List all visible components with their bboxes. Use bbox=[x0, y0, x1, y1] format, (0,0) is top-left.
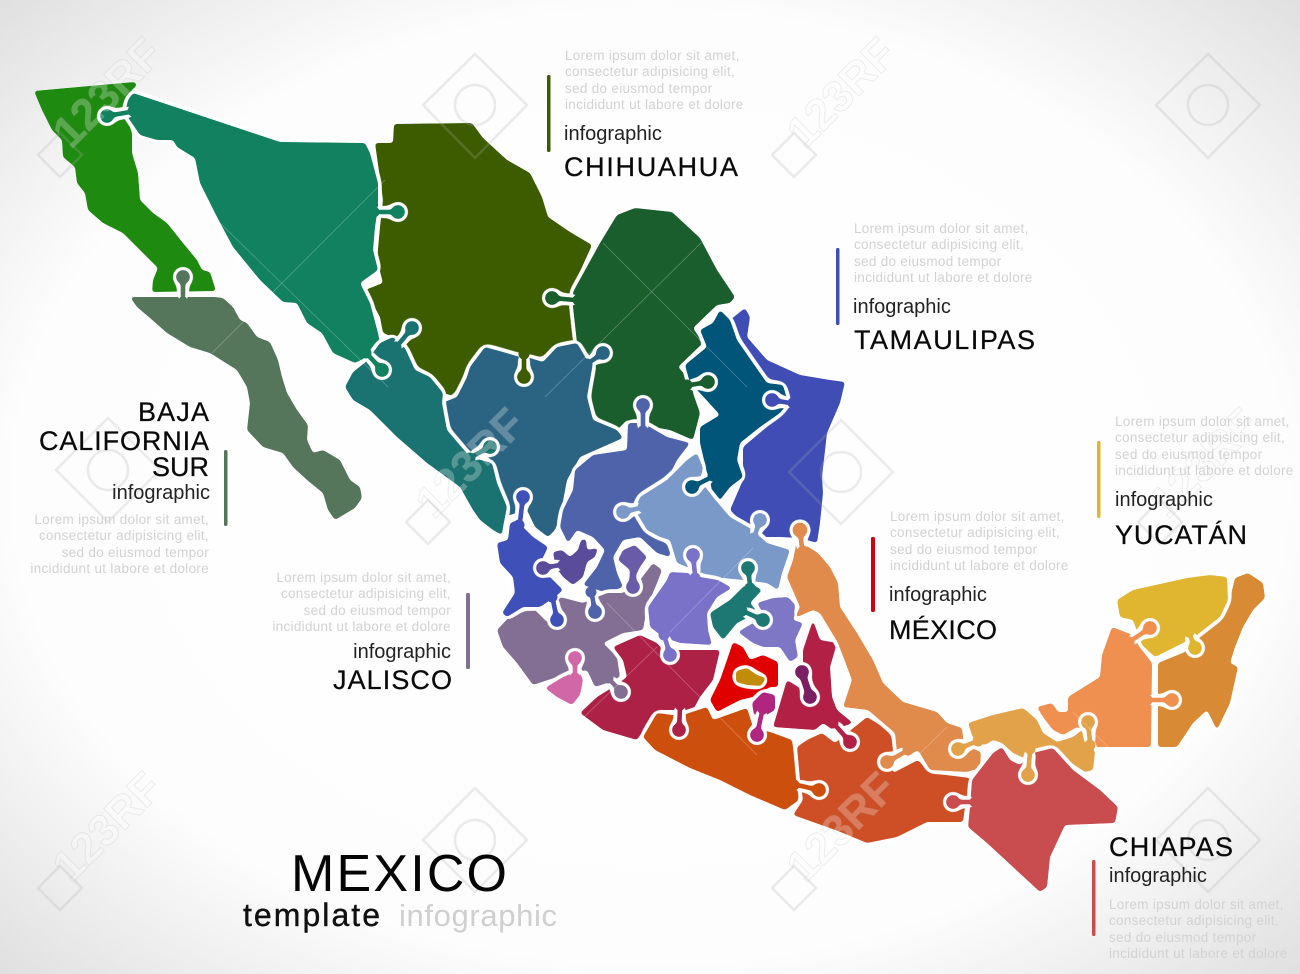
label: México bbox=[871, 509, 1069, 645]
region: Chiapas bbox=[968, 747, 1118, 892]
label: Chiapas: infographic bbox=[1109, 865, 1207, 887]
region: Baja California bbox=[34, 82, 216, 292]
label: Tamaulipas bbox=[836, 221, 1035, 355]
watermarks: 123RF bbox=[1140, 399, 1268, 527]
region: Baja California Sur bbox=[130, 297, 362, 520]
label: México: MÉXICO bbox=[889, 615, 997, 645]
title: MEXICO bbox=[291, 845, 507, 903]
region: Nayarit bbox=[497, 520, 563, 617]
label: Chihuahua: infographic bbox=[564, 123, 662, 145]
label: Yucatán bbox=[1097, 414, 1294, 550]
label: Jalisco: incididunt ut labore et dolore bbox=[272, 619, 451, 634]
label: Baja California Sur: incididunt ut labore et dolore bbox=[30, 561, 209, 576]
label: Chiapas: incididunt ut labore et dolore bbox=[1109, 946, 1288, 961]
label: Tamaulipas: sed do eiusmod tempor bbox=[854, 254, 1002, 269]
label: Baja California Sur bbox=[30, 397, 228, 576]
label: Chihuahua: CHIHUAHUA bbox=[564, 152, 738, 182]
label: México: consectetur adipisicing elit, bbox=[890, 525, 1060, 540]
label: Chihuahua: consectetur adipisicing elit, bbox=[565, 64, 735, 79]
region: Querétaro teal bbox=[710, 583, 762, 640]
region: Colima bbox=[545, 667, 583, 705]
label: Jalisco: infographic bbox=[353, 641, 451, 663]
label: Chihuahua: sed do eiusmod tempor bbox=[565, 81, 713, 96]
title bbox=[243, 845, 557, 933]
label: Yucatán: consectetur adipisicing elit, bbox=[1115, 430, 1285, 445]
region: Tabasco bbox=[968, 708, 1095, 772]
label: Chihuahua: Lorem ipsum dolor sit amet, bbox=[565, 48, 740, 63]
label: Baja California Sur: SUR bbox=[152, 452, 209, 482]
region: Jalisco bbox=[497, 563, 662, 687]
label: Yucatán: YUCATÁN bbox=[1115, 520, 1247, 550]
label: Baja California Sur: BAJA bbox=[138, 397, 209, 427]
watermarks: 123RF bbox=[777, 763, 905, 891]
label: Yucatán: incididunt ut labore et dolore bbox=[1115, 463, 1294, 478]
region: Guanajuato bbox=[648, 572, 732, 645]
label: Tamaulipas: infographic bbox=[853, 296, 951, 318]
region: Hidalgo bbox=[738, 597, 803, 662]
region: Estado de México bbox=[710, 642, 778, 712]
region: Nuevo León bbox=[685, 310, 788, 500]
label: Jalisco: sed do eiusmod tempor bbox=[304, 603, 451, 618]
label: Baja California Sur: CALIFORNIA bbox=[39, 426, 209, 456]
map of Mexico bbox=[34, 82, 1265, 892]
region: Oaxaca bbox=[793, 717, 970, 843]
label: Tamaulipas: Lorem ipsum dolor sit amet, bbox=[854, 221, 1029, 236]
label: Tamaulipas: consectetur adipisicing elit, bbox=[854, 237, 1024, 252]
label: Yucatán: infographic bbox=[1115, 489, 1213, 511]
region: Aguascalientes bbox=[538, 539, 598, 585]
region: Durango bbox=[442, 343, 623, 537]
region: Michoacán bbox=[580, 635, 720, 740]
region: Tamaulipas bbox=[730, 308, 845, 543]
region: Sonora bbox=[125, 93, 380, 363]
label: México: infographic bbox=[889, 584, 987, 606]
label: Chihuahua bbox=[547, 48, 744, 182]
title: infographic bbox=[399, 898, 557, 933]
label: Chiapas bbox=[1092, 832, 1288, 961]
label: Jalisco bbox=[272, 570, 470, 695]
watermarks: 123RF bbox=[43, 763, 171, 891]
label: Jalisco: Lorem ipsum dolor sit amet, bbox=[276, 570, 451, 585]
region: Tlaxcala bbox=[795, 665, 817, 704]
label: México: incididunt ut labore et dolore bbox=[890, 558, 1069, 573]
title: template bbox=[243, 897, 380, 933]
region: Veracruz bbox=[787, 540, 981, 772]
label: Jalisco: JALISCO bbox=[333, 665, 452, 695]
region: Sinaloa bbox=[345, 337, 507, 535]
label: México: sed do eiusmod tempor bbox=[890, 542, 1038, 557]
label: México: Lorem ipsum dolor sit amet, bbox=[890, 509, 1065, 524]
watermarks: 123RF bbox=[777, 29, 905, 157]
region: Coahuila bbox=[573, 208, 735, 440]
label: Baja California Sur: consectetur adipisicing elit, bbox=[39, 528, 209, 543]
region: Zacatecas bbox=[560, 423, 690, 593]
region: Querétaro purple bbox=[618, 545, 647, 594]
label: Chihuahua: incididunt ut labore et dolore bbox=[565, 97, 744, 112]
label: Chiapas: Lorem ipsum dolor sit amet, bbox=[1109, 897, 1284, 912]
label: Baja California Sur: infographic bbox=[112, 482, 210, 504]
label: Chiapas: CHIAPAS bbox=[1109, 832, 1233, 862]
label: Jalisco: consectetur adipisicing elit, bbox=[281, 586, 451, 601]
region: Puebla bbox=[773, 620, 853, 730]
region: San Luis Potosí bbox=[635, 453, 790, 590]
label: Yucatán: sed do eiusmod tempor bbox=[1115, 447, 1263, 462]
region: Campeche bbox=[1037, 627, 1152, 747]
label: Chiapas: sed do eiusmod tempor bbox=[1109, 930, 1257, 945]
label: Chiapas: consectetur adipisicing elit, bbox=[1109, 913, 1279, 928]
puzzle knobs bbox=[100, 106, 1202, 809]
region: Yucatán bbox=[1117, 575, 1228, 657]
label: Tamaulipas: TAMAULIPAS bbox=[854, 325, 1035, 355]
region: Morelos bbox=[752, 692, 775, 717]
region: Chihuahua bbox=[365, 123, 592, 397]
region: Quintana Roo bbox=[1158, 573, 1265, 747]
label: Baja California Sur: Lorem ipsum dolor sit amet, bbox=[34, 512, 209, 527]
watermarks: 123RF bbox=[406, 399, 534, 527]
label: Tamaulipas: incididunt ut labore et dolore bbox=[854, 270, 1033, 285]
label: Baja California Sur: sed do eiusmod tempor bbox=[62, 545, 209, 560]
watermarks: 123RF bbox=[43, 29, 171, 157]
region: Guerrero bbox=[643, 707, 803, 810]
label: Yucatán: Lorem ipsum dolor sit amet, bbox=[1115, 414, 1290, 429]
region: Distrito Federal gold bbox=[736, 668, 766, 686]
